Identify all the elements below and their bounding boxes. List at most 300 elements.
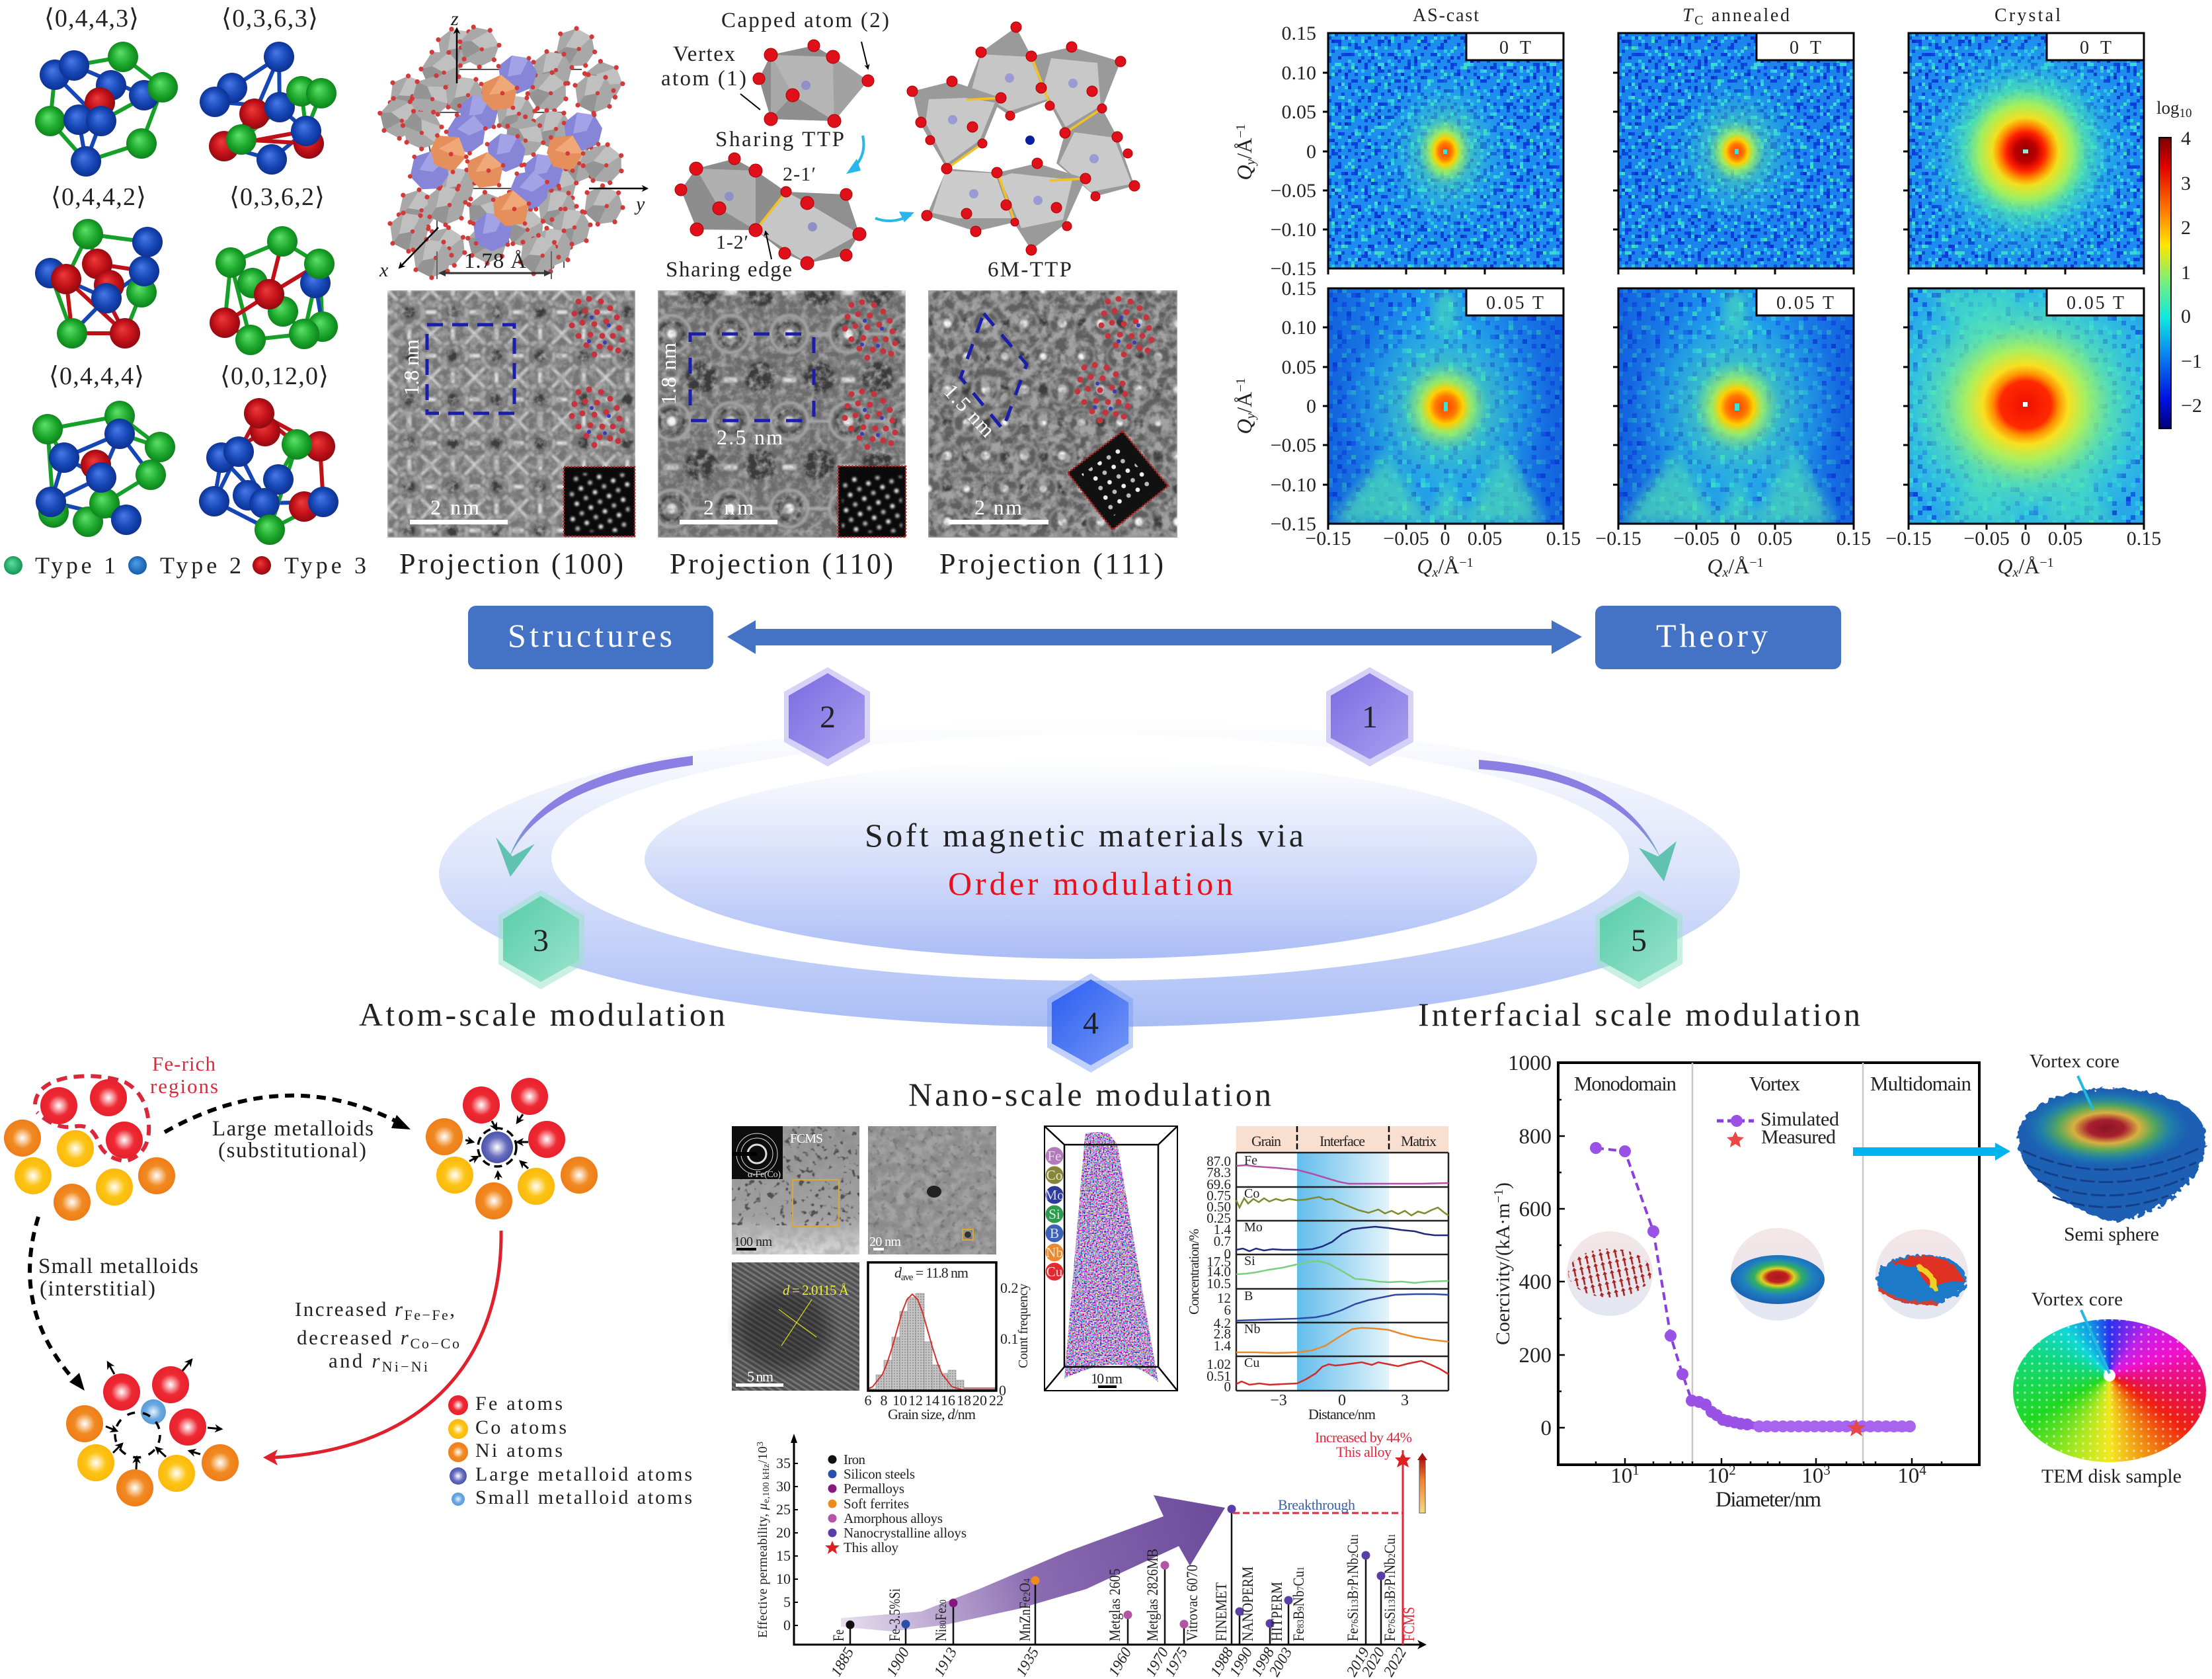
chart: grain size histogram: 14	[925, 1392, 939, 1409]
x ticks: 10	[1897, 1464, 1919, 1488]
label: Fe-rich regions: Fe-rich	[152, 1052, 216, 1075]
label: Large metalloids	[212, 1117, 374, 1163]
label: radius changes	[295, 1297, 459, 1375]
alloy names: HITPERM	[1269, 1582, 1285, 1641]
box: Theory	[1595, 606, 1841, 669]
panel: central modulation diagram	[359, 606, 1860, 1113]
inset: simulated image	[838, 466, 906, 537]
chart: grain size histogram: 8	[881, 1392, 887, 1409]
x tick labels: −0.15	[1305, 528, 1351, 550]
chart: grain size histogram: 0.2	[1000, 1280, 1018, 1296]
label boxes: 0.05 T	[1466, 288, 2144, 315]
chart: concentration profiles: Cu	[1244, 1356, 1259, 1370]
chart: concentration profiles: 10.5	[1206, 1276, 1231, 1291]
y tick labels: 0	[1306, 395, 1316, 417]
y tick labels: 0.05	[1281, 356, 1316, 378]
chart: concentration profiles: −3	[1270, 1392, 1287, 1409]
image: HRTEM lattice	[732, 1262, 859, 1391]
x tick labels: −0.15	[1885, 528, 1932, 550]
cluster: interstitial	[66, 1360, 239, 1506]
legend: atom types: Type 1	[35, 552, 116, 579]
panel: crystal structure	[369, 8, 647, 282]
chart: concentration profiles: Concentration/%	[1186, 1229, 1202, 1315]
year labels: 1900	[883, 1645, 913, 1679]
heading: cluster 0,3,6,2: ⟨0,3,6,2⟩	[229, 183, 325, 211]
y ticks: 20	[776, 1524, 791, 1541]
chart: grain size histogram: 16	[941, 1392, 955, 1409]
axis labels: −1	[1491, 1189, 1506, 1203]
axis labels	[1491, 1182, 1821, 1512]
label: Small metalloids	[38, 1254, 198, 1301]
chart: grain size histogram: 0.1	[1000, 1331, 1018, 1347]
x axis labels: x	[2012, 565, 2018, 580]
legend: Silicon steels	[844, 1466, 915, 1482]
colorbar: −2	[2181, 395, 2202, 417]
legend: atom types: Type 3	[284, 552, 366, 579]
label boxes: 0 T	[1466, 33, 2144, 60]
legend: atoms: Co atoms	[475, 1416, 567, 1438]
caption: Projection (110)	[670, 548, 893, 580]
regime separators	[1692, 1063, 1863, 1465]
label: Vertex atom: Vertex	[673, 42, 735, 66]
caption: Projection (111)	[939, 548, 1164, 580]
arrow: right curved	[1479, 760, 1677, 881]
y axis labels	[1232, 124, 1258, 434]
legend: Nanocrystalline alloys	[844, 1525, 967, 1541]
dimension: 1.78 Å: 1.78 Å	[464, 249, 526, 273]
icon: cluster 0,4,4,2	[35, 219, 163, 348]
frames and axes	[1323, 33, 2144, 530]
x tick labels: 0.05	[2048, 528, 2082, 550]
chart: grain size histogram: 10	[892, 1392, 907, 1409]
label: 1.5 nm: 1.5 nm	[939, 379, 1000, 442]
alloy names: Fe76Si13B7P1Nb2Cu1	[1382, 1534, 1398, 1641]
colorbar: log	[2156, 98, 2180, 118]
year labels: 2020	[1359, 1645, 1388, 1679]
chart: concentration profiles: 1.4	[1214, 1338, 1231, 1354]
chart: concentration profiles: Nb	[1244, 1322, 1260, 1336]
sphere inset: monodomain	[1567, 1231, 1653, 1316]
chart: concentration profiles: Fe	[1244, 1153, 1257, 1168]
arrow: double headed	[727, 620, 1582, 654]
chart: concentration profiles: 0	[1338, 1392, 1346, 1409]
hexagon 4	[1047, 973, 1133, 1073]
chart: grain size histogram: = 11.8 nm	[912, 1264, 968, 1281]
icon: edge sharing TTP pair	[675, 153, 866, 270]
x tick labels: 0.15	[1837, 528, 1871, 550]
hexagon 4: 4	[1083, 1006, 1099, 1041]
panel: atom-scale modulation	[4, 1052, 692, 1508]
regime labels	[1574, 1072, 1971, 1095]
label: Sharing TTP: Sharing TTP	[715, 128, 844, 151]
rise arrow	[1417, 1453, 1427, 1513]
overlay: atom clusters	[842, 299, 898, 450]
y tick labels: 0.15	[1281, 278, 1316, 300]
annotation: dashed unit cell	[427, 325, 514, 413]
y axis labels: y	[1244, 159, 1258, 167]
label: 6M-TTP: 6M-TTP	[988, 258, 1072, 282]
colorbar: −1	[2181, 350, 2202, 372]
box: Structures: Structures	[508, 617, 672, 654]
legend: Iron	[844, 1452, 866, 1467]
icon: 6M-TTP ring	[907, 22, 1140, 255]
chart: concentration profiles: 6	[1224, 1302, 1231, 1318]
label: radius changes: decreased r	[297, 1326, 409, 1349]
breakthrough line: Breakthrough	[1278, 1496, 1355, 1513]
label: Interfacial scale modulation: Interfacial scale modulation	[1418, 996, 1860, 1033]
label: 2-1': 2-1′	[783, 163, 816, 185]
label: radius changes: Ni−Ni	[382, 1358, 428, 1375]
x ticks: 4	[1919, 1462, 1926, 1478]
y tick labels: 0.10	[1281, 317, 1316, 339]
image: TEM bright field: α-Fe(Co)	[748, 1170, 781, 1180]
arrow: red curve	[263, 1231, 501, 1465]
year labels: 1975	[1162, 1645, 1191, 1679]
axes arrows	[399, 28, 647, 268]
y tick labels: 0.05	[1281, 101, 1316, 123]
sphere inset: multidomain	[1876, 1229, 1968, 1319]
year labels: 1988	[1207, 1645, 1237, 1679]
label: Sharing edge: Sharing edge	[666, 258, 792, 282]
alloy names: MnZnFe2O4	[1017, 1578, 1033, 1641]
dimension: 1.78 Å	[437, 249, 551, 279]
image: TEM zoom: 20 nm	[869, 1235, 901, 1249]
legend: Permalloys	[844, 1481, 904, 1496]
label: TEM disk sample: TEM disk sample	[2041, 1465, 2182, 1487]
heading: AS-cast: AS-cast	[1413, 5, 1479, 26]
chart: concentration profiles: 2.8	[1214, 1326, 1231, 1342]
text: center title: Order modulation	[948, 865, 1233, 902]
chart: concentration profiles: 0	[1224, 1246, 1231, 1262]
label: Vertex atom: atom (1)	[661, 67, 746, 91]
chart: concentration profiles: Mo	[1244, 1220, 1263, 1235]
chart: grain size histogram: 22	[989, 1392, 1004, 1409]
arrow: curved cyan right	[875, 212, 914, 222]
label boxes: 0 T: 0 T	[2080, 38, 2112, 58]
icon: cluster 0,3,6,2	[210, 226, 338, 355]
x axis labels: /Å	[1438, 554, 1459, 578]
regime labels: Monodomain	[1574, 1072, 1677, 1095]
scale bar: 2 nm	[949, 495, 1048, 524]
year labels: 1990	[1226, 1645, 1256, 1679]
chart: concentration profiles: Interface	[1320, 1133, 1365, 1149]
hexagon 5	[1595, 890, 1682, 989]
icon: cluster 0,0,12,0	[199, 398, 338, 545]
colorbar: 3	[2181, 173, 2191, 194]
y label: 3	[756, 1442, 766, 1446]
chart: concentration profiles: 0.7	[1214, 1233, 1231, 1249]
lollipops	[846, 1505, 1386, 1645]
colorbar: 4	[2181, 128, 2191, 149]
chart: atom probe tomography: Nb	[1046, 1245, 1063, 1260]
image: TEM bright field: 100 nm	[734, 1235, 772, 1249]
axis label y: y	[634, 193, 645, 215]
image: TEM bright field	[732, 1126, 859, 1254]
heatmap: AS-cast 0.05 T	[1329, 290, 1563, 522]
icon: cluster 0,4,4,4	[32, 401, 175, 537]
icon: single TTP	[740, 40, 874, 128]
label: Fe-rich regions	[150, 1052, 218, 1098]
alloy names: Fe76Si13B7P1Nb2Cu1	[1345, 1534, 1361, 1641]
chart: grain size histogram: 20	[972, 1392, 987, 1409]
y ticks: 0	[1540, 1416, 1552, 1440]
caption: Projection (100)	[399, 548, 623, 580]
heatmap: Tc annealed 0.05 T	[1620, 290, 1852, 522]
label boxes: 0 T: 0 T	[1790, 38, 1821, 58]
chart: atom probe tomography: Mo	[1045, 1187, 1064, 1203]
y axis labels: /Å	[1232, 138, 1256, 159]
x ticks: 10	[1707, 1464, 1729, 1488]
y tick labels	[1271, 22, 1316, 535]
chart: grain size histogram: 6	[865, 1392, 871, 1409]
image: TEM 111	[928, 290, 1177, 538]
heatmap: Tc annealed 0 T	[1620, 34, 1852, 267]
ellipse: outer ring	[439, 720, 1740, 1027]
year labels: 1913	[931, 1645, 960, 1679]
x axis labels: −1	[1459, 555, 1474, 570]
panel: microscopy Projection 111	[928, 290, 1177, 580]
heading: Tc annealed: annealed	[1705, 5, 1790, 26]
label: vortex core 2	[2032, 1289, 2123, 1373]
hexagon 3	[498, 890, 584, 989]
axis label x: x	[379, 259, 389, 281]
heatmap: Crystal 0 T	[1909, 34, 2143, 267]
year labels: 2003	[1266, 1645, 1295, 1679]
x axis labels: x	[1721, 565, 1728, 580]
y axis labels: −1	[1234, 124, 1248, 138]
y ticks: 25	[776, 1501, 791, 1518]
hexagon 3: 3	[533, 923, 549, 958]
chart: concentration profiles: Grain	[1251, 1133, 1281, 1149]
year labels: 1960	[1105, 1645, 1135, 1679]
regime labels: Multidomain	[1870, 1072, 1971, 1095]
chart: concentration profiles: 0.50	[1206, 1199, 1231, 1215]
y ticks: 0	[783, 1617, 791, 1633]
y label: /10	[756, 1446, 770, 1463]
heading: cluster 0,3,6,3: ⟨0,3,6,3⟩	[221, 5, 318, 32]
cluster: pristine with Fe-rich regions	[4, 1076, 175, 1221]
legend: atoms: Small metalloid atoms	[475, 1487, 692, 1508]
x axis labels: Q	[1997, 554, 2012, 578]
chart: concentration profiles: Matrix	[1401, 1133, 1437, 1149]
legend: atoms	[448, 1393, 692, 1508]
x axis labels: x	[1431, 565, 1438, 580]
panel: microscopy Projection 100	[387, 290, 635, 580]
year labels: 2022	[1380, 1645, 1409, 1679]
x axis labels: /Å	[2018, 554, 2039, 578]
chart: concentration profiles: 14.0	[1206, 1264, 1231, 1280]
label: Capped atom: Capped atom (2)	[721, 9, 889, 32]
label: 2.5 nm: 2.5 nm	[717, 425, 783, 449]
y tick labels: 0.15	[1281, 22, 1316, 44]
chart: concentration profiles: 4.2	[1214, 1315, 1231, 1331]
label boxes: 0 T: 0 T	[1499, 38, 1531, 58]
scale bar: 2 nm: 2 nm	[703, 495, 754, 519]
icon: cluster 0,4,4,3	[35, 42, 178, 177]
x tick labels: 0.15	[1546, 528, 1581, 550]
ellipse: white gap	[551, 735, 1629, 981]
legend: atoms: Ni atoms	[475, 1440, 563, 1461]
y tick labels: −0.15	[1271, 258, 1316, 280]
label: 1-2': 1-2′	[716, 231, 748, 253]
legend: atoms: Fe atoms	[475, 1393, 563, 1414]
data: measured	[1847, 1419, 1866, 1436]
x tick labels	[1305, 528, 2161, 550]
hexagon 5: 5	[1631, 923, 1647, 958]
image: TEM 110	[658, 290, 906, 538]
regime labels: Vortex	[1749, 1072, 1801, 1095]
sphere inset: vortex	[1731, 1228, 1825, 1321]
x tick labels: −0.05	[1963, 528, 2010, 550]
image: semi sphere vortex	[2018, 1088, 2206, 1221]
heading: Tc annealed: C	[1694, 13, 1704, 28]
chart: grain size histogram: Grain size, d/nm	[888, 1406, 976, 1422]
axis labels: )	[1492, 1182, 1514, 1189]
x ticks: 10	[1801, 1464, 1823, 1488]
y ticks: 800	[1519, 1125, 1552, 1149]
icon: cluster 0,3,6,3	[200, 42, 336, 175]
legend: Simulated	[1760, 1108, 1839, 1130]
x axis labels	[1417, 554, 2054, 580]
chart: concentration profiles: 0.75	[1206, 1188, 1231, 1204]
overlay: atom clusters	[1075, 296, 1154, 423]
alloy names: Metglas 2605	[1107, 1569, 1123, 1641]
colorbar: 10	[2180, 106, 2192, 120]
alloy names: NANOPERM	[1240, 1567, 1256, 1641]
chart: grain size histogram: 18	[957, 1392, 971, 1409]
label: Small metalloids: (interstitial)	[40, 1277, 155, 1301]
y label: e,100 kHz	[762, 1464, 771, 1503]
scale bar: 2 nm	[410, 495, 508, 524]
heading: cluster 0,0,12,0: ⟨0,0,12,0⟩	[220, 362, 329, 390]
chart: grain size histogram: d	[894, 1264, 902, 1281]
label: Vertex atom	[661, 42, 746, 91]
year labels	[828, 1645, 1409, 1679]
scale bar: 2 nm: 2 nm	[974, 495, 1022, 519]
year labels: 1998	[1248, 1645, 1278, 1679]
alloy names: FINEMET	[1213, 1582, 1230, 1641]
y tick labels: −0.10	[1271, 219, 1316, 241]
chart: concentration profiles: 0.25	[1206, 1210, 1231, 1226]
arrow: left curved	[496, 756, 693, 877]
image: TEM zoom	[868, 1126, 996, 1254]
heading: cluster 0,4,4,2: ⟨0,4,4,2⟩	[51, 183, 146, 211]
chart: concentration profiles: 1.4	[1214, 1221, 1231, 1237]
box: Structures	[468, 606, 713, 669]
image: TEM 100	[387, 290, 635, 538]
label: Small metalloids: Small metalloids	[38, 1254, 198, 1278]
label: vortex core 1	[2030, 1051, 2119, 1110]
x tick labels: 0	[2020, 528, 2031, 550]
label: Nano-scale modulation: Nano-scale modulation	[908, 1076, 1271, 1113]
y ticks: 15	[776, 1547, 791, 1564]
y ticks: 400	[1519, 1270, 1552, 1294]
chart: grain size histogram: 12	[908, 1392, 923, 1409]
x tick labels: 0	[1440, 528, 1450, 550]
text: center title: Soft magnetic materials via	[865, 817, 1304, 854]
colorbar: 0	[2181, 306, 2191, 327]
legend	[1717, 1108, 1839, 1148]
x ticks: 10	[1610, 1464, 1632, 1488]
label: radius changes: and r	[329, 1349, 379, 1372]
arrow: to semi sphere	[1853, 1143, 2010, 1161]
hexagon 1: 1	[1362, 700, 1378, 735]
x tick labels: 0	[1731, 528, 1740, 550]
label: radius changes: Fe−Fe	[405, 1307, 448, 1323]
heading: cluster 0,4,4,4: ⟨0,4,4,4⟩	[49, 362, 144, 390]
chart: atom probe tomography: B	[1050, 1225, 1059, 1241]
scale bar: 2 nm: 2 nm	[430, 495, 479, 519]
panel: Voronoi polyhedra clusters	[4, 5, 366, 579]
big arrow	[841, 1495, 1225, 1631]
arrow: curved cyan down	[846, 136, 863, 174]
chart: effective permeability timeline	[756, 1429, 1427, 1679]
chart: concentration profiles: 3	[1401, 1392, 1409, 1409]
colorbar	[2156, 98, 2202, 429]
colorbar: 2	[2181, 217, 2191, 239]
legend: Measured	[1761, 1126, 1836, 1148]
scale bar: 2 nm	[680, 495, 777, 524]
y ticks: 30	[776, 1478, 791, 1495]
x ticks: 3	[1823, 1462, 1831, 1478]
chart: concentration profiles: Distance/nm	[1308, 1406, 1376, 1422]
chart: concentration profiles: Co	[1244, 1186, 1259, 1201]
x ticks: 1	[1632, 1462, 1639, 1478]
panel: TTP polyhedra	[661, 9, 1140, 282]
image: HRTEM lattice: d = 2.0115 Å	[783, 1282, 849, 1298]
label: Semi sphere: Semi sphere	[2064, 1223, 2159, 1245]
y axis labels: −1	[1234, 378, 1248, 392]
y axis labels: Q	[1232, 165, 1256, 181]
axes	[791, 1434, 1427, 1649]
label boxes: 0.05 T: 0.05 T	[1776, 293, 1834, 313]
cluster: substitutional	[426, 1078, 598, 1219]
frame	[1558, 1063, 1979, 1465]
x axis labels: Q	[1417, 554, 1432, 578]
chart: grain size histogram: ave	[901, 1272, 914, 1283]
alloy names: Vitrovac 6070	[1184, 1565, 1201, 1641]
x axis labels: /Å	[1728, 554, 1749, 578]
alloy names: Fe83B9Nb7Cu1	[1290, 1567, 1307, 1641]
inset: simulated image	[564, 467, 635, 536]
label: radius changes: ,	[450, 1297, 455, 1321]
chart: atom probe tomography: Si	[1048, 1206, 1060, 1222]
chart: concentration profiles: 0.51	[1206, 1368, 1231, 1384]
legend: atoms: Large metalloid atoms	[475, 1463, 692, 1485]
y tick labels: 0	[1306, 141, 1316, 163]
y tick labels: −0.15	[1271, 513, 1316, 535]
alloy names: Ni80Fe20	[933, 1600, 949, 1641]
label: Large metalloids: (substitutional)	[218, 1139, 366, 1163]
y axis labels: Q	[1232, 419, 1256, 434]
chart: grain size histogram: 0	[999, 1382, 1006, 1399]
hexagon 2: 2	[820, 700, 836, 735]
panel: interfacial-scale modulation	[1491, 1051, 2206, 1512]
arrow: large metalloids dashed	[165, 1096, 411, 1132]
chart: concentration profiles: 69.6	[1206, 1176, 1231, 1192]
x tick labels: −0.05	[1383, 528, 1429, 550]
y tick labels: −0.10	[1271, 474, 1316, 496]
y ticks	[776, 1455, 791, 1633]
legend: Soft ferrites	[844, 1496, 909, 1512]
year labels: 1970	[1142, 1645, 1172, 1679]
x axis labels: −1	[2039, 555, 2054, 570]
x tick labels: 0.05	[1758, 528, 1792, 550]
chart: atom probe tomography	[1045, 1126, 1177, 1391]
x tick labels: 0.05	[1468, 528, 1502, 550]
x axis labels: Q	[1707, 554, 1722, 578]
chart: concentration profiles: 1.02	[1206, 1356, 1231, 1372]
